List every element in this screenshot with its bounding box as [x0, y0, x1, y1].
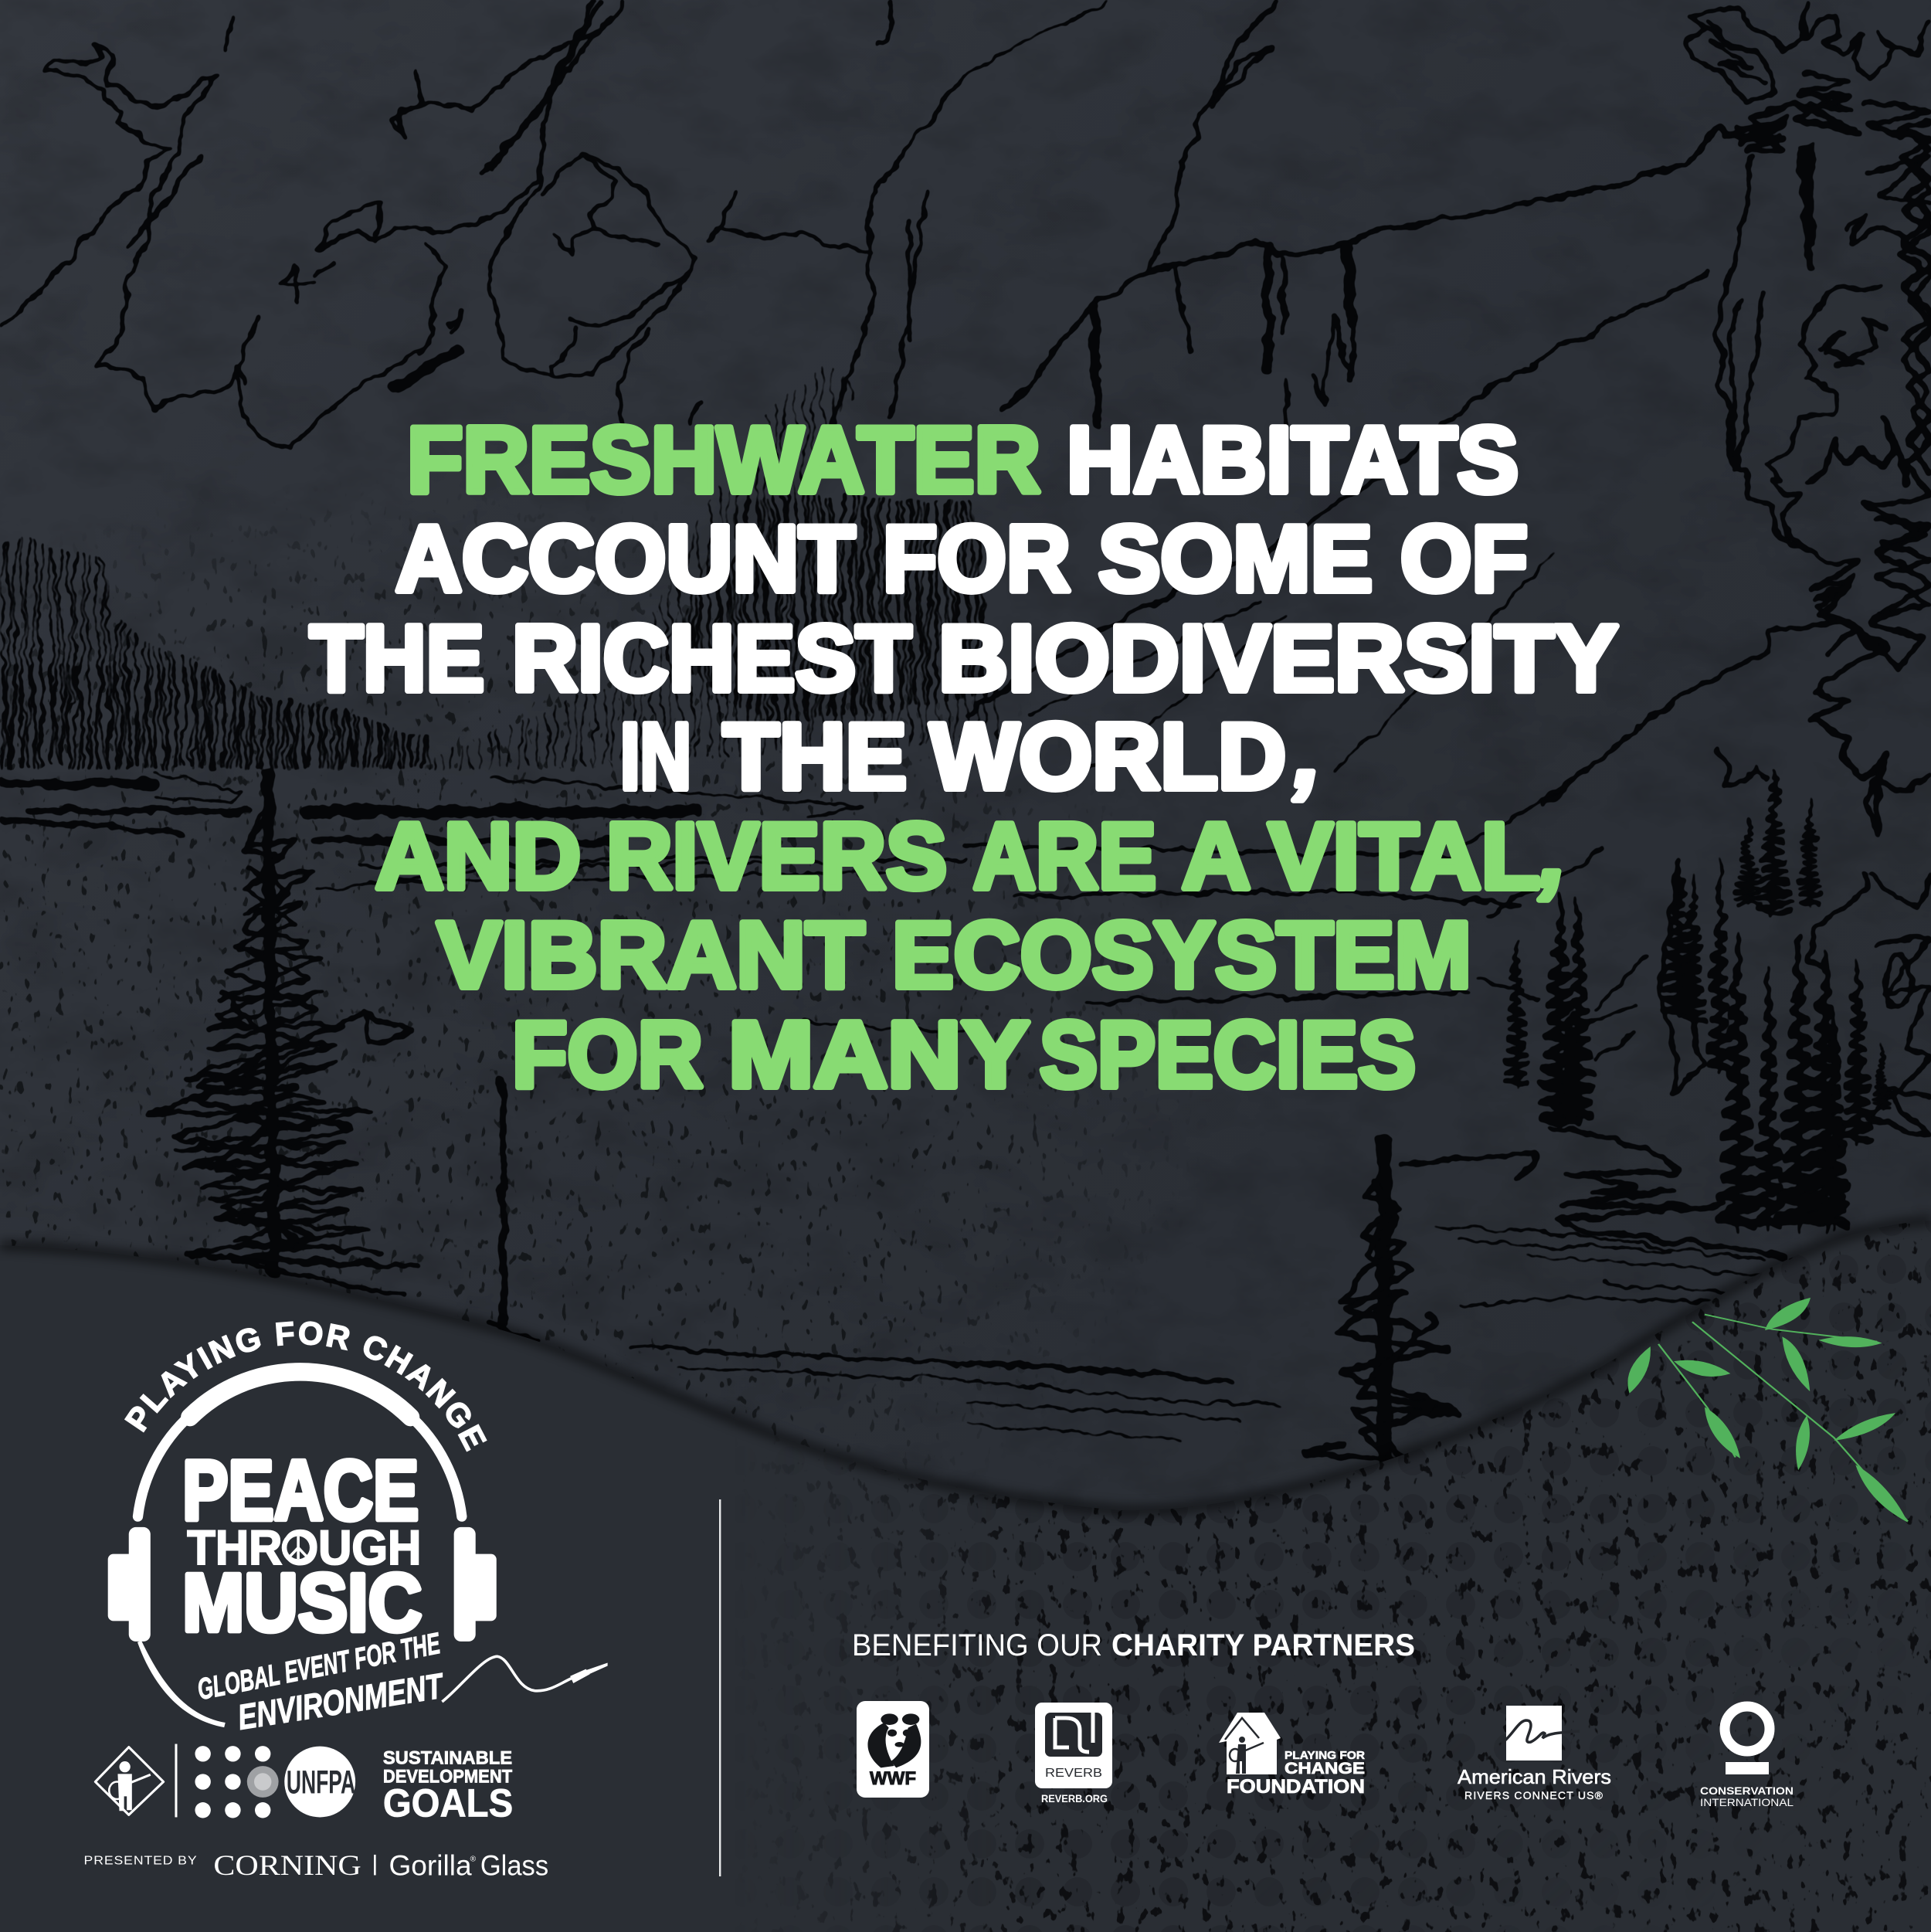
logo: Playing For Change Foundation: CHANGE — [1285, 1760, 1365, 1778]
headline line 2: OF — [1400, 506, 1528, 611]
event logo: Peace Through Music — [84, 1321, 608, 1881]
headline line 5: AND — [375, 803, 581, 908]
sketch: distant treelines — [0, 365, 1004, 772]
logo: Conservation International — [1700, 1706, 1794, 1808]
logo: American Rivers: RIVERS CONNECT US® — [1464, 1789, 1604, 1801]
sketch: upper left shoreline and islands — [0, 0, 966, 448]
logo wordmark: Through: THROUGH — [187, 1521, 421, 1575]
headline line 3: RICHEST — [512, 606, 911, 711]
headline line 3: THE — [310, 606, 484, 711]
logo: UNFPA — [284, 1747, 355, 1817]
headline line 3: BIODIVERSITY — [938, 606, 1618, 711]
tagline: ENVIRONMENT — [235, 1665, 448, 1737]
curved title: PLAYING FOR CHANGE — [124, 1321, 487, 1452]
speckle texture: upper ground — [0, 518, 1149, 1460]
sponsor line: ® — [470, 1856, 477, 1864]
curved foreground panel — [0, 1214, 1931, 1932]
headline line 5: ARE — [973, 803, 1156, 908]
headline line 4: WORLD — [930, 704, 1286, 809]
charity partners heading — [852, 1628, 1415, 1662]
logo: WWF: WWF — [870, 1768, 916, 1789]
tagline — [195, 1627, 448, 1737]
icon: headphones — [108, 1372, 497, 1727]
logo: Playing For Change Foundation: PLAYING FOR — [1285, 1749, 1365, 1762]
logo wordmark: Peace: PEACE — [182, 1444, 419, 1538]
headline line 2: ACCOUNT — [395, 506, 855, 611]
logo: Reverb: REVERB — [1045, 1767, 1102, 1780]
tagline: GLOBAL EVENT FOR THE — [195, 1627, 443, 1706]
headline line 3 — [310, 606, 1618, 711]
partner logos row — [95, 1744, 513, 1825]
icon: UNDP dots — [195, 1746, 279, 1818]
headline line 5: A — [1182, 803, 1251, 908]
logo: UNFPA: UNFPA — [287, 1764, 355, 1801]
sketch: large pine tree — [148, 772, 536, 1340]
headline line 7: SPECIES — [1040, 1002, 1416, 1107]
illustration: river landscape sketch — [0, 0, 1931, 1477]
vertical divider — [719, 1499, 721, 1876]
sponsor line: Gorilla — [389, 1849, 472, 1881]
headline line 1 — [407, 407, 1519, 512]
headline line 4: , — [1293, 701, 1321, 806]
logo: Playing For Change Foundation: FOUNDATION — [1227, 1776, 1365, 1798]
logo: Sustainable Development Goals: DEVELOPMENT — [383, 1767, 512, 1788]
headline line 1: FRESHWATER — [407, 407, 1040, 512]
headline line 5: VITAL — [1268, 803, 1540, 908]
sketch: right foliage and cliff — [1545, 4, 1931, 1230]
sketch: water strokes on the left — [0, 772, 966, 1380]
logo: Reverb — [1035, 1703, 1112, 1805]
logo: Reverb: REVERB.ORG — [1041, 1792, 1108, 1805]
sponsor line: CORNING — [213, 1849, 361, 1881]
headline line 4: IN — [620, 704, 691, 809]
logo: Sustainable Development Goals — [383, 1748, 513, 1825]
headline line 2: SOME — [1098, 506, 1373, 611]
logo wordmark: Music: MUSIC — [182, 1557, 422, 1648]
headline — [310, 407, 1618, 1107]
headline line 7: MANY — [728, 1002, 1030, 1107]
sponsor line: Glass — [480, 1849, 548, 1881]
logo: Sustainable Development Goals: GOALS — [383, 1781, 513, 1825]
logo: WWF — [857, 1701, 929, 1798]
headline line 5: , — [1539, 800, 1566, 905]
logo: Sustainable Development Goals: SUSTAINABLE — [383, 1748, 512, 1769]
headline line 6: VIBRANT — [437, 902, 864, 1007]
headline line 7 — [512, 1002, 1416, 1107]
logo: American Rivers: American Rivers — [1458, 1765, 1611, 1788]
sponsor line: PRESENTED BY — [84, 1855, 198, 1868]
charity partners heading: BENEFITING OUR — [852, 1628, 1102, 1662]
headline line 4: THE — [723, 704, 907, 809]
logo: Playing For Change Foundation — [1219, 1713, 1365, 1798]
green leaves — [1627, 1298, 1908, 1523]
speckle texture: lower right ground — [800, 1223, 1931, 1932]
logo: Conservation International: CONSERVATION — [1700, 1784, 1794, 1797]
headline line 5 — [375, 800, 1566, 908]
headline line 2: FOR — [883, 506, 1071, 611]
headline line 2 — [395, 506, 1528, 611]
sketch: upper right cliff ridge — [966, 0, 1748, 772]
sketch: river bank and forest — [966, 772, 1785, 1477]
headline line 5: RIVERS — [606, 803, 947, 908]
logo: Conservation International: INTERNATIONAL — [1700, 1796, 1794, 1808]
icon: Playing For Change diamond — [95, 1747, 164, 1815]
headline line 6: ECOSYSTEM — [892, 902, 1471, 1007]
logo: American Rivers — [1458, 1706, 1611, 1801]
headline line 1: HABITATS — [1067, 407, 1519, 512]
charity partners heading: CHARITY PARTNERS — [1111, 1628, 1415, 1662]
headline line 6 — [437, 902, 1471, 1007]
headline line 4 — [620, 701, 1321, 809]
headline line 7: FOR — [512, 1002, 703, 1107]
icon: headphone cable and jack — [442, 1656, 608, 1702]
sponsor line — [84, 1849, 548, 1881]
